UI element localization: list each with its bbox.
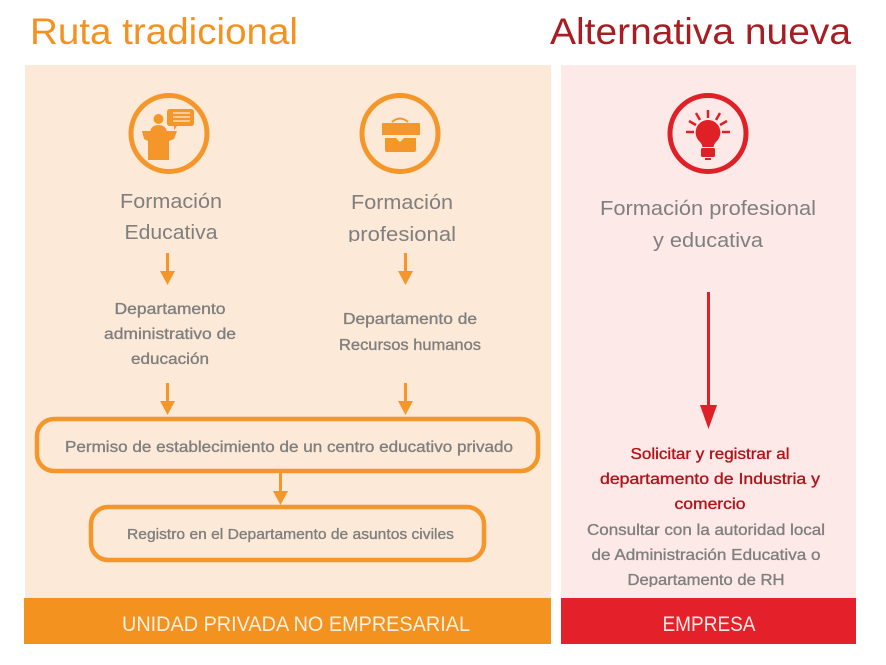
text: Departamento administrativo de educación: educación [131,351,209,368]
text: Solicitar y registrar [600,446,820,513]
text: Solicitar y registrar: comercio [674,496,746,513]
box: Registro [91,507,484,560]
text: Consultar con la autoridad local: Departamento de RH [628,572,784,589]
arrow: long red [700,292,717,429]
text: Formación Educativa: Formación [120,191,222,213]
icon: speaker at podium [131,96,207,172]
panel: alternativa nueva [561,65,856,599]
arrow: educación to Permiso [160,383,175,415]
text: Consultar con la autoridad local [587,522,825,589]
text: Formación Educativa [120,191,222,244]
text: Solicitar y registrar: Solicitar y registrar al [630,446,790,463]
bar: empresa: EMPRESA [662,613,756,636]
icon: light bulb [670,96,746,172]
text: Consultar con la autoridad local: Consultar con la autoridad local [587,522,825,539]
text: Departamento de Recursos humanos [339,311,481,354]
bar: unidad privada no empresarial [24,598,551,644]
box: Permiso de establecimiento: Permiso de establecimiento de un centro educativo privado [65,439,513,456]
text: Formación profesional y educativa: Formación profesional [600,198,816,220]
panel: ruta tradicional [25,65,551,599]
text: Departamento administrativo de educación: Departamento [114,301,226,318]
text: Consultar con la autoridad local: de Administración Educativa o [592,547,821,564]
box: Registro: Registro en el Departamento de asuntos civiles [127,526,454,543]
text: Formación profesional: Formación [351,192,453,214]
title: Alternativa nueva: Alternativa nueva [550,11,851,52]
text: Departamento administrativo de educación: administrativo de [104,326,236,343]
arrow: Permiso to Registro [273,473,288,505]
text: Formación Educativa: Educativa [124,222,218,244]
arrow: profesional to Recursos humanos [398,253,413,285]
bar: unidad privada no empresarial: UNIDAD PRIVADA NO EMPRESARIAL [122,613,470,636]
icon: briefcase [362,96,438,172]
text: Solicitar y registrar: departamento de Industria y [600,471,820,488]
text: Departamento de Recursos humanos: Departamento de [343,311,477,328]
box: Permiso de establecimiento [37,419,538,471]
text: Formación profesional: profesional [348,224,456,246]
arrow: Educativa to Departamento [160,253,175,285]
arrow: Recursos humanos to Permiso [398,383,413,415]
text: Departamento de Recursos humanos: Recursos humanos [339,337,481,354]
text: Formación profesional y educativa: y educativa [653,230,764,252]
title: Ruta tradicional: Ruta tradicional [30,11,298,52]
text: Formación profesional y educativa [600,198,816,252]
text: Departamento administrativo de educación [104,301,236,368]
bar: empresa [561,598,856,644]
text: Formación profesional [349,194,455,242]
